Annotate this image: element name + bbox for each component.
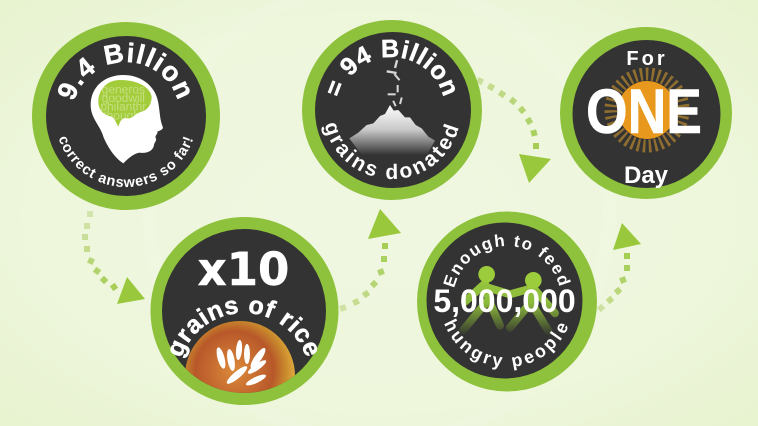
heading: x10: x10	[198, 243, 289, 296]
caption: hungry people: hungry people	[444, 318, 568, 370]
arrow: answers to grains	[82, 211, 145, 304]
icon: head with brain: goodwill	[102, 91, 145, 105]
arrow: rice to donated	[339, 209, 401, 312]
icon: rice pile	[349, 60, 435, 155]
icon: head with brain: thought	[103, 108, 144, 122]
heading: ONE: ONE	[586, 77, 702, 147]
caption: correct answers so far: correct answers so far!	[60, 136, 193, 188]
icon: two people holding hands	[463, 266, 555, 331]
panel: x10 grains of rice	[150, 217, 338, 405]
icon: head with brain	[91, 75, 163, 163]
icon: head with brain: philanthr	[100, 100, 146, 114]
caption: For: For	[626, 48, 668, 70]
icon: head with brain: generos	[102, 82, 145, 96]
arrow: feed to one day	[597, 223, 641, 312]
panel: 9.4 billion answers	[32, 22, 220, 210]
caption: Enough to feed: Enough to feed	[443, 234, 571, 288]
panel: enough to feed 5,000,000	[417, 212, 597, 392]
icon: coin with rice	[186, 321, 295, 393]
heading: = 94 Billion: = 94 Billion	[328, 40, 455, 96]
panel: for one day	[560, 27, 732, 199]
arrow: donated to feed	[476, 77, 551, 183]
figure: 5,000,000: 5,000,000	[433, 283, 576, 319]
heading: 9.4 Billion: 9.4 Billion	[58, 42, 190, 100]
caption: Day: Day	[624, 162, 669, 189]
caption: grains donated: grains donated	[321, 123, 458, 180]
caption: grains of rice: grains of rice	[170, 300, 318, 358]
panel: 94 billion grains donated	[302, 20, 482, 200]
icon: sun	[611, 74, 683, 146]
